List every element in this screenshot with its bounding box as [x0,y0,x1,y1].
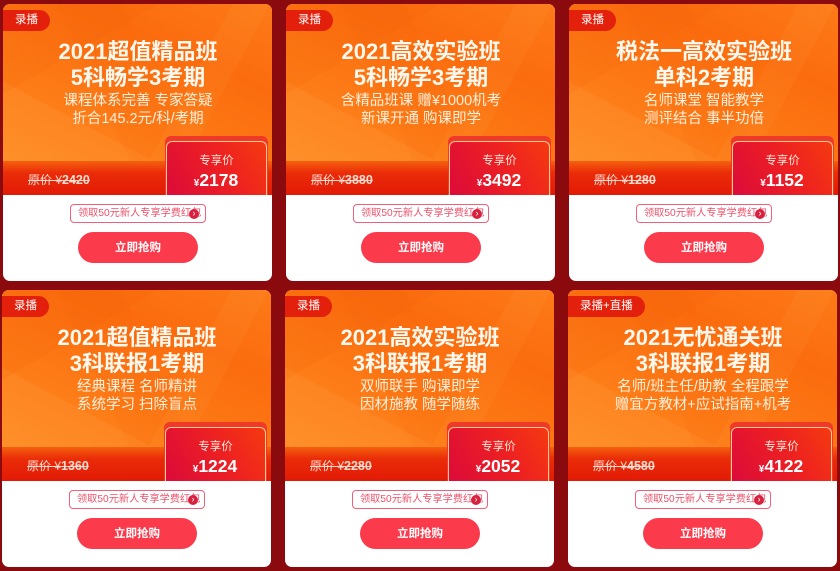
tag [569,10,616,31]
heading: 2021无忧通关班 [624,325,782,350]
buy button [361,232,481,263]
heading: 2021高效实验班 [342,39,500,64]
original price: 原价 ¥1280 [594,173,656,187]
heading [59,39,217,90]
heading: 2021高效实验班 [341,325,499,350]
buy button [644,232,764,263]
description: 含精品班课 赠¥1000机考 [341,93,501,109]
coupon: 领取50元新人专享学费红包 [643,494,766,505]
exclusive price: 专享价 [199,155,234,167]
heading [342,39,500,90]
heading: 3科联报1考期 [353,351,487,376]
description: 系统学习 扫除盲点 [77,397,197,413]
description [77,378,197,413]
description: 双师联手 购课即学 [360,379,480,395]
tag: 录播 [298,14,321,26]
description: 课程体系完善 专家答疑 [63,93,213,109]
panel: course card 2 [286,4,555,281]
description [644,92,764,127]
heading: 税法一高效实验班 [616,39,792,64]
coupon [70,204,206,223]
heading [616,39,792,90]
description: 名师课堂 智能教学 [644,93,764,109]
original price: 原价 ¥4580 [593,459,655,473]
heading: 单科2考期 [654,65,754,90]
buy button: 立即抢购 [680,528,726,540]
buy button [78,232,198,263]
tag [3,10,50,31]
panel: course card 1: › [192,208,196,218]
tag: 录播 [15,14,38,26]
exclusive price: 专享价 [198,441,233,453]
description: 赠宜方教材+应试指南+机考 [615,397,791,413]
exclusive price: ¥4122 [759,456,803,476]
coupon [636,204,772,223]
buy button: 立即抢购 [681,242,727,254]
tag [286,10,333,31]
tag [2,296,49,317]
tag: 录播+直播 [580,300,633,312]
description [341,92,501,127]
description: 折合145.2元/科/考期 [72,111,204,127]
exclusive price: ¥2178 [194,170,238,190]
heading: 3科联报1考期 [636,351,770,376]
coupon: 领取50元新人专享学费红包 [77,494,200,505]
tag: 录播 [581,14,604,26]
buy button: 立即抢购 [114,528,160,540]
panel: course card 2: › [476,208,478,218]
heading: 5科畅学3考期 [354,65,488,90]
description [360,378,480,413]
exclusive price [165,427,266,480]
exclusive price [732,141,833,194]
panel: course card 4: › [192,494,194,504]
heading [341,325,499,376]
exclusive price: 专享价 [482,155,517,167]
coupon [635,490,771,509]
heading: 3科联报1考期 [70,351,204,376]
tag [568,296,645,317]
exclusive price [731,427,832,480]
buy button: 立即抢购 [397,528,443,540]
panel: course card 5: › [474,494,478,504]
heading: 2021超值精品班 [59,39,217,64]
description [63,92,213,127]
panel: course card 5 [285,290,554,567]
tag: 录播 [297,300,320,312]
buy button [643,518,763,549]
original price: 原价 ¥1360 [27,459,89,473]
panel: course card 1 [3,4,272,281]
panel: course card 4 [2,290,271,567]
exclusive price [448,427,549,480]
original price: 原价 ¥2420 [28,173,90,187]
exclusive price [449,141,550,194]
heading [624,325,782,376]
exclusive price: ¥2052 [476,456,520,476]
description: 名师/班主任/助教 全程跟学 [617,379,789,395]
description: 测评结合 事半功倍 [644,111,764,127]
heading [58,325,216,376]
heading: 5科畅学3考期 [71,65,205,90]
exclusive price: ¥1152 [760,170,804,190]
exclusive price: ¥3492 [477,170,521,190]
description: 经典课程 名师精讲 [77,379,197,395]
exclusive price: 专享价 [764,441,799,453]
original price: 原价 ¥3880 [311,173,373,187]
panel: course card 6: › [758,494,760,504]
exclusive price: ¥1224 [193,456,237,476]
description [615,378,791,413]
coupon [69,490,205,509]
exclusive price [166,141,267,194]
coupon [353,204,489,223]
exclusive price: 专享价 [765,155,800,167]
coupon: 领取50元新人专享学费红包 [360,494,483,505]
description: 因材施教 随学随练 [360,397,480,413]
tag [285,296,332,317]
exclusive price: 专享价 [481,441,516,453]
coupon: 领取50元新人专享学费红包 [78,208,201,219]
coupon [352,490,488,509]
buy button: 立即抢购 [398,242,444,254]
original price: 原价 ¥2280 [310,459,372,473]
coupon: 领取50元新人专享学费红包 [644,208,767,219]
coupon: 领取50元新人专享学费红包 [361,208,484,219]
buy button: 立即抢购 [115,242,161,254]
description: 新课开通 购课即学 [361,111,481,127]
heading: 2021超值精品班 [58,325,216,350]
buy button [77,518,197,549]
panel: course card 3: › [758,208,762,218]
buy button [360,518,480,549]
tag: 录播 [14,300,37,312]
panel: course card 3 [569,4,838,281]
panel: course card 6 [568,290,837,567]
